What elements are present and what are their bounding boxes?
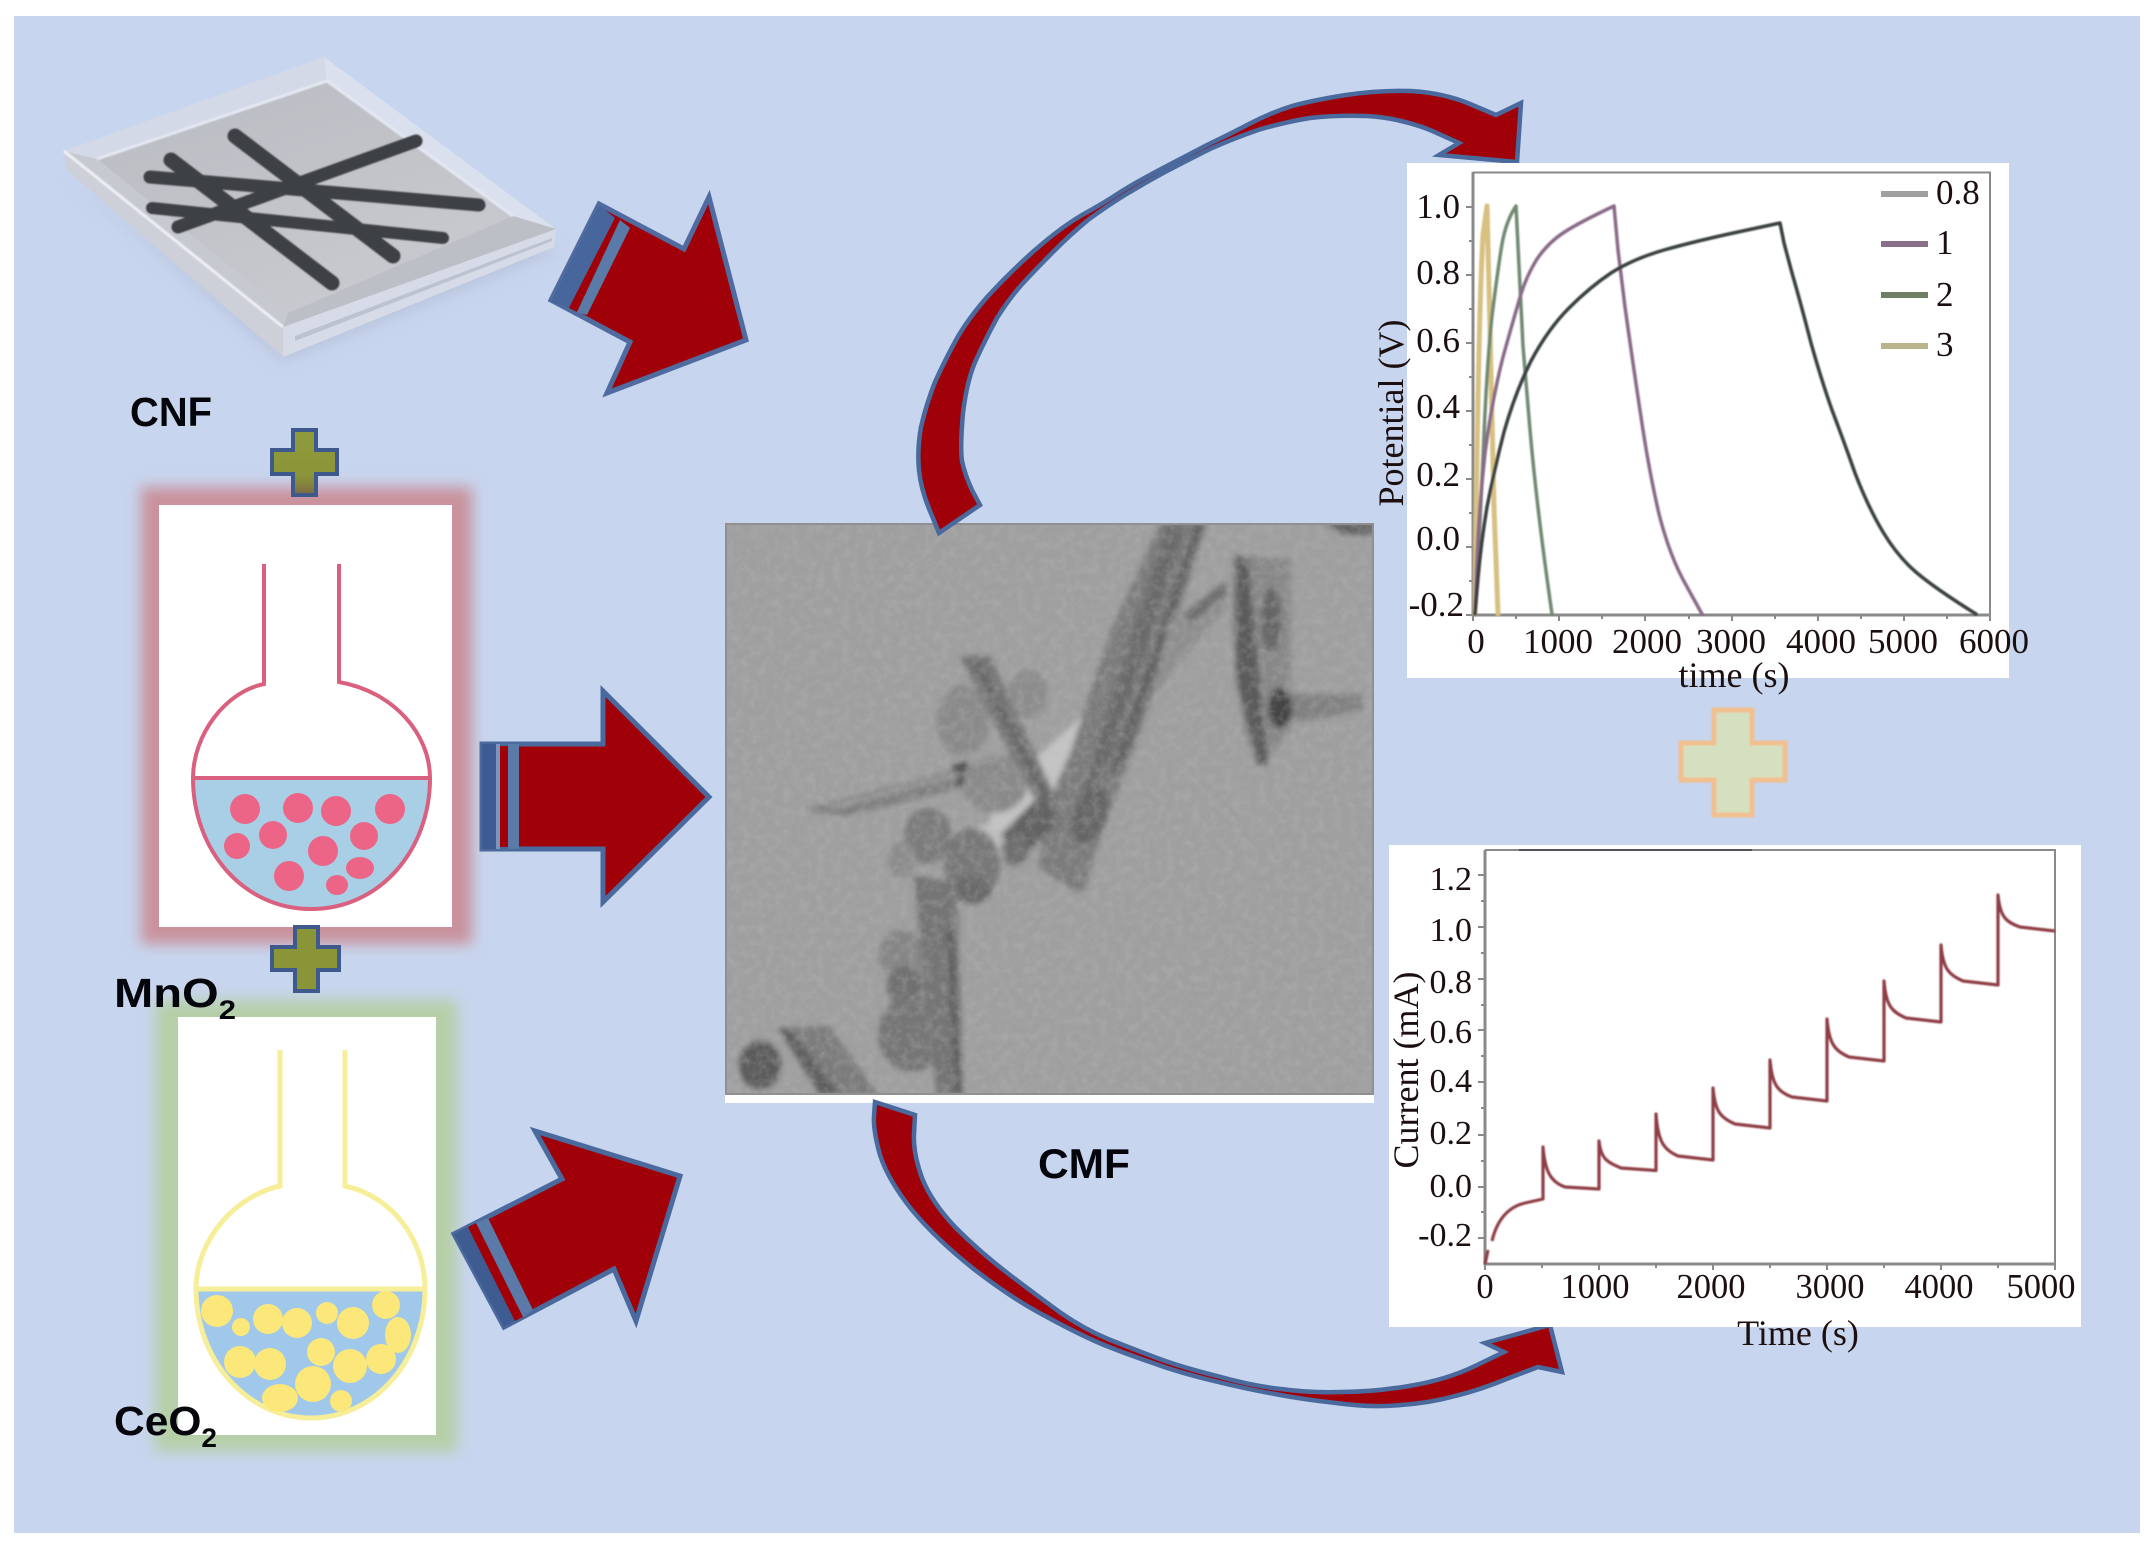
y tick labels: 0.4 — [1430, 1063, 1472, 1100]
x tick labels: 2000 — [1676, 1268, 1746, 1306]
carbon nanofibers — [150, 136, 479, 283]
x axis title: Time (s) — [1737, 1313, 1859, 1353]
legend: 0.8 — [1936, 173, 1980, 212]
legend: 1 — [1936, 223, 1954, 262]
y tick labels: 0.6 — [1430, 1014, 1472, 1051]
axes — [1478, 850, 2055, 1270]
liquid — [198, 1289, 423, 1418]
particles — [224, 793, 405, 895]
x tick labels: 1000 — [1523, 622, 1593, 661]
x tick labels — [1467, 622, 2029, 661]
y tick labels: 0.0 — [1430, 1168, 1472, 1205]
nanorod: large — [1039, 523, 1207, 891]
y tick labels: -0.2 — [1409, 585, 1464, 624]
label: MnO2: 2 — [219, 995, 236, 1025]
plus sign: MnO2 + CeO2 — [272, 927, 339, 991]
y tick labels: 0.0 — [1416, 519, 1460, 558]
particles — [201, 1291, 411, 1412]
arrow: MnO2 to CMF — [482, 691, 709, 902]
x tick labels: 0 — [1476, 1268, 1494, 1306]
curved arrow: CMF to current chart — [874, 1102, 1562, 1406]
chart: current vs time — [1386, 845, 2081, 1353]
panel: MnO2 flask — [141, 487, 472, 944]
x tick labels: 3000 — [1796, 1268, 1864, 1306]
legend: 3 — [1936, 325, 1954, 364]
right cluster — [1231, 555, 1291, 765]
halo — [988, 717, 1083, 834]
liquid — [193, 778, 430, 909]
label: CNF: CNF — [130, 389, 212, 435]
label: CeO2: CeO — [114, 1398, 198, 1444]
current curve — [1485, 895, 2055, 1264]
x tick labels: 0 — [1467, 622, 1485, 661]
plus sign: CNF + MnO2 — [272, 430, 337, 495]
flask outline — [193, 564, 430, 909]
y tick labels: 1.0 — [1416, 187, 1460, 226]
y tick labels: 0.2 — [1416, 455, 1460, 494]
y axis title: Current (mA) — [1386, 972, 1426, 1168]
x tick labels: 6000 — [1959, 622, 2029, 661]
axis titles: time (s) — [1679, 655, 1789, 695]
lower rod and blobs — [914, 875, 963, 1095]
axes — [1466, 172, 1990, 621]
label: CeO2: 2 — [201, 1423, 217, 1453]
y tick labels: 0.8 — [1416, 253, 1460, 292]
x tick labels: 5000 — [1868, 622, 1938, 661]
x tick labels: 5000 — [2006, 1268, 2076, 1306]
x tick labels: 4000 — [1904, 1268, 1974, 1306]
curves — [1475, 206, 1976, 614]
plus sign: between charts — [1681, 710, 1785, 815]
chart: potential vs time — [1371, 163, 2029, 695]
arrow: CNF to CMF — [551, 197, 746, 393]
y tick labels: 0.4 — [1416, 387, 1460, 426]
arrow: CeO2 to CMF — [454, 1131, 680, 1327]
curved arrow: CMF to potential chart — [918, 91, 1521, 533]
y axis title: Potential (V) — [1371, 320, 1411, 506]
flask outline — [196, 1050, 425, 1418]
legend: 2 — [1936, 275, 1954, 314]
x tick labels: 3000 — [1696, 622, 1766, 661]
y tick labels — [1418, 861, 1472, 1254]
micrograph: CMF TEM image — [725, 523, 1374, 1103]
pale plate — [1158, 598, 1226, 687]
y tick labels: 0.8 — [1430, 964, 1472, 1001]
x tick labels — [1476, 1268, 2076, 1306]
x tick labels: 1000 — [1560, 1268, 1630, 1306]
panel: CeO2 flask — [155, 1000, 457, 1452]
legend — [1881, 173, 1980, 364]
x tick labels: 4000 — [1786, 622, 1856, 661]
y tick labels: 0.6 — [1416, 321, 1460, 360]
y tick labels — [1409, 187, 1464, 624]
diagonal rod — [959, 656, 1057, 808]
y tick labels: 1.2 — [1430, 861, 1472, 898]
needle rod — [803, 753, 1021, 816]
y tick labels: -0.2 — [1418, 1217, 1472, 1254]
bottom-left cluster — [739, 1041, 781, 1089]
CNF glass slab with carbon nanofibers — [64, 57, 562, 362]
nanoparticle blobs — [1008, 670, 1048, 718]
label: MnO2: MnO — [114, 970, 205, 1016]
x tick labels: 2000 — [1612, 622, 1682, 661]
y tick labels: 1.0 — [1430, 912, 1472, 949]
y tick labels: 0.2 — [1430, 1115, 1472, 1152]
label: CMF: CMF — [1038, 1140, 1130, 1187]
